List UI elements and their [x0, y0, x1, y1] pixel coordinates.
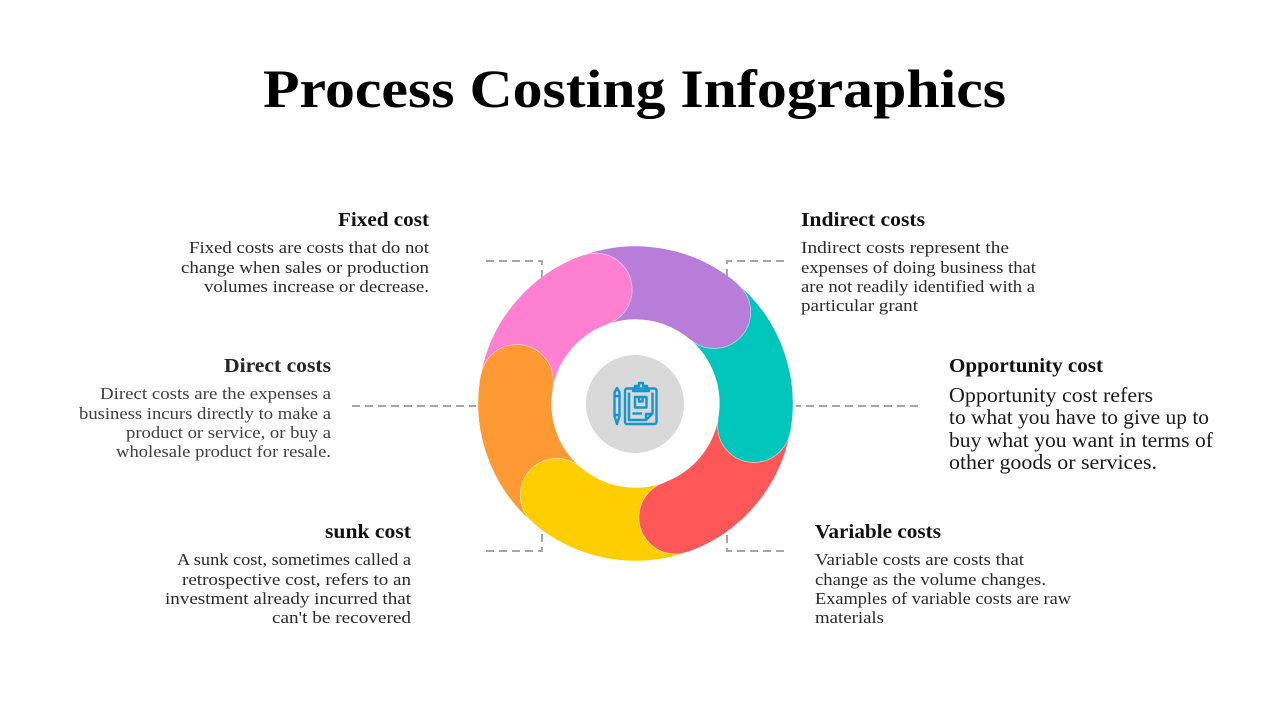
- donut ring: [480, 253, 791, 554]
- text block: sunk cost: [165, 521, 412, 627]
- connector: indirect costs: [727, 261, 784, 282]
- text block: indirect costs: are not readily identified with a: [801, 277, 1036, 296]
- text block: variable costs: Variable costs: [815, 521, 941, 543]
- title: Process Costing Infographics: [263, 58, 1006, 119]
- text block: opportunity cost: [949, 355, 1213, 474]
- text block: sunk cost: A sunk cost, sometimes called a: [177, 550, 412, 569]
- text block: indirect costs: Indirect costs: [801, 209, 925, 231]
- text block: direct costs: business incurs directly to make a: [79, 404, 332, 423]
- text block: sunk cost: can't be recovered: [272, 608, 412, 627]
- text block: direct costs: Direct costs are the expenses a: [100, 384, 332, 403]
- text block: fixed cost: [181, 209, 430, 296]
- center disc: [586, 355, 684, 453]
- text block: sunk cost: sunk cost: [325, 521, 411, 543]
- text block: direct costs: Direct costs: [224, 355, 331, 377]
- text block: variable costs: Variable costs are costs that: [815, 550, 1024, 569]
- text block: variable costs: materials: [815, 608, 884, 627]
- text block: direct costs: wholesale product for resale.: [116, 442, 331, 461]
- text block: fixed cost: volumes increase or decrease.: [204, 277, 429, 296]
- text block: opportunity cost: Opportunity cost refers: [949, 385, 1153, 407]
- text block: direct costs: product or service, or buy a: [126, 423, 332, 442]
- connector: variable costs: [727, 526, 784, 551]
- text block: opportunity cost: Opportunity cost: [949, 355, 1103, 377]
- text block: opportunity cost: other goods or services.: [949, 452, 1157, 474]
- text block: fixed cost: Fixed cost: [338, 209, 429, 231]
- text block: sunk cost: investment already incurred that: [165, 589, 411, 608]
- text block: indirect costs: [801, 209, 1036, 315]
- text block: indirect costs: expenses of doing business that: [801, 258, 1036, 277]
- text block: sunk cost: retrospective cost, refers to an: [182, 570, 412, 589]
- text block: variable costs: change as the volume changes.: [815, 570, 1046, 589]
- connector: opportunity cost: [796, 405, 918, 407]
- connector: fixed cost: [486, 261, 542, 282]
- connector: direct costs: [352, 405, 476, 407]
- text block: fixed cost: Fixed costs are costs that do not: [189, 238, 429, 257]
- connector: sunk cost: [486, 526, 542, 551]
- text block: fixed cost: change when sales or production: [181, 258, 430, 277]
- text block: indirect costs: particular grant: [801, 296, 918, 315]
- text block: opportunity cost: buy what you want in terms of: [949, 430, 1213, 452]
- text block: direct costs: [79, 355, 332, 461]
- text block: variable costs: [815, 521, 1071, 627]
- text block: variable costs: Examples of variable costs are raw: [815, 589, 1071, 608]
- text block: opportunity cost: to what you have to give up to: [949, 407, 1209, 429]
- text block: indirect costs: Indirect costs represent the: [801, 238, 1009, 257]
- icon: clipboard and pen: [614, 383, 656, 424]
